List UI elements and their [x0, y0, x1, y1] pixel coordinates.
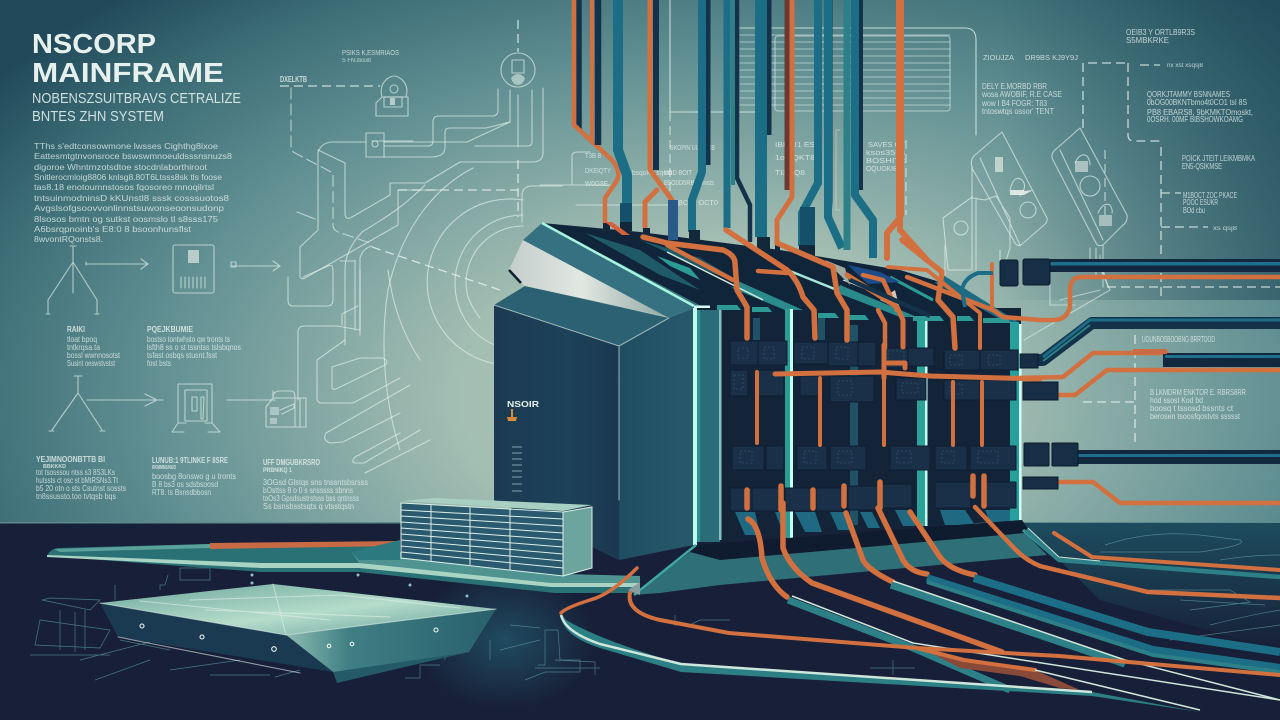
label: lock caption: PSIKS K,ESMRIAOS	[342, 50, 399, 57]
text block: top right heading: ZIOUJZA	[983, 55, 1014, 62]
cable 9 teal	[799, 0, 842, 257]
icon: lock	[376, 76, 408, 116]
machine badge	[507, 399, 539, 421]
arrow 3	[87, 394, 163, 406]
orange verticals lower	[757, 372, 982, 445]
cable 3 teal	[618, 0, 632, 231]
text block: right column 1: PB8 EBARS8, 9bKMKTOmoskt,	[1147, 108, 1253, 117]
cable right 1	[1050, 259, 1280, 272]
text block: device notes: wosa AWOBIF, R.E CASE	[981, 90, 1062, 99]
text block: right column 1: 0OSRH. 00MF BIBSHOWKOAMG	[1147, 115, 1243, 124]
module row 4	[730, 482, 1016, 535]
text block: right column 3: berosen tsoosfqostvts ssssst	[1150, 412, 1241, 421]
connector line	[227, 399, 275, 401]
text block: mid schematic left: T3B 8	[585, 153, 601, 160]
intro text block: tntsuinmodninsD kKUnstl8 sssk cosssuotos8	[34, 194, 230, 203]
text block: mid schematic left	[585, 153, 672, 188]
long sweep cable	[561, 568, 1200, 712]
connector blocks	[1000, 259, 1078, 489]
teal strip 1	[785, 309, 793, 538]
subtitle: BNTES ZHN SYSTEM	[32, 108, 164, 125]
intro text block: A6bsrqpnoinb's E8:0 8 bsoonhunsflst	[34, 225, 192, 234]
label block: system 3	[263, 458, 368, 511]
upper middle schematic	[540, 0, 1105, 215]
cable right 3	[1133, 349, 1280, 367]
cable right 4	[1078, 450, 1280, 464]
text block: right column 1: QORKJTAMMY BSNNAMES	[1147, 90, 1230, 99]
flow diagram row 1	[46, 245, 280, 314]
arrow 1	[86, 259, 148, 269]
cable right orange 3	[1058, 370, 1280, 395]
text block: right column 2: M1BOCT ZOC PKACE	[1183, 191, 1237, 200]
text block: right column 2: POOC ESUKR	[1183, 198, 1218, 207]
title	[32, 28, 224, 88]
label block: system 1	[36, 455, 126, 501]
text block: mid schematic right: ksos35bs	[866, 150, 906, 157]
text block: mid schematic right: SAVES OT	[868, 142, 906, 149]
label block: system 2: LUNUB:1 9TLINKE F 8SRE	[152, 456, 228, 465]
mainframe machine	[494, 223, 1058, 595]
text block: mid schematic centre: B5O0D5RB Ubnsts	[664, 180, 714, 187]
intro text block: TThs s'edtconsowmone lwsses Cighthg8ixoe	[34, 142, 219, 151]
right cables	[1000, 259, 1280, 503]
label block: raid	[67, 325, 121, 368]
floor cable 8	[1026, 528, 1280, 577]
intro text block: Avgslsofgsoovvonlinnstsuwonseoonsudonp	[34, 204, 225, 213]
label block: system 3: toOs3 Gpsdsustrstsss bss qntnsss	[263, 494, 359, 503]
label block: system 2: RT8. ts Bsnsdbbosn	[152, 488, 211, 497]
text block: mid schematic centre: SKOPIN UUETEIB	[670, 145, 715, 152]
label block: processing: bostso tontwhsto qw tronts ts	[147, 335, 230, 344]
label block: system 2	[152, 456, 236, 497]
icon: storage box	[173, 245, 214, 293]
text block: mid schematic centre: BCQ) OCT0	[678, 200, 718, 207]
text block: right column 1: 0bOG00BKNTbmo4t0CO1 tsI 8S	[1147, 98, 1247, 107]
teal clips	[717, 305, 1011, 323]
teal strip 2	[917, 318, 928, 526]
cable right orange 4	[1058, 482, 1280, 503]
glow edge vertical	[693, 308, 697, 545]
label block: raid: tloat bpoq	[67, 335, 97, 344]
floor cable 3	[846, 513, 1280, 700]
icon: device A	[971, 132, 1047, 270]
label block: processing: tsfast osbqs stusnt.fsst	[147, 351, 218, 360]
text block: right column 3: B LKMDRM ENKTOR E. RBRS8RR	[1150, 388, 1246, 397]
cable 2 orange	[592, 0, 598, 145]
floor cable 4	[878, 508, 1280, 672]
label block: system 1: hutssts ct osc st bMtRSNs3.Tt	[36, 476, 119, 485]
text block: top right heading: S5MBKRKE	[1126, 36, 1169, 45]
icon: circle badge	[501, 53, 535, 87]
cable 7 teal wide	[757, 0, 770, 250]
text block: right column 3	[1142, 335, 1246, 421]
intro text block: digoroe Whntrnzotsdtoe stocdnlaborthiroot	[34, 163, 208, 172]
intro text block: tas8.18 enotoumnstosos fqosoreo mnoqilrtsl	[34, 183, 214, 192]
label block: system 1: YEJIMNOONBTTB BI	[36, 455, 105, 464]
intro text block: 8wvontRQonsts8.	[34, 235, 103, 244]
floor cable 1	[748, 519, 1280, 700]
text block: right column 3: boosq t tssosd bssnts ct	[1150, 404, 1234, 413]
cable 10 teal	[847, 0, 873, 258]
text block: mid schematic centre	[664, 145, 718, 207]
label block: system 2: RKMMMUNUD	[152, 465, 176, 471]
text block: top right heading: xs qsj8	[1213, 226, 1238, 232]
lower base band	[690, 520, 1035, 560]
cable 1 orange	[574, 0, 618, 232]
label block: raid: tntkrqsa.ta	[67, 343, 100, 352]
flow diagram row 2	[49, 376, 306, 432]
title: MAINFRAME	[32, 57, 224, 88]
vent ticks	[512, 447, 522, 491]
label block: processing: PQEJKBUMIE	[147, 325, 194, 334]
node box	[366, 133, 384, 157]
circuit line diagram	[280, 20, 562, 473]
label: top left node: DXELKTB	[280, 75, 307, 84]
label block: raid: bossl wwnnosotst	[67, 351, 121, 360]
label block: raid: RAIKI	[67, 325, 85, 334]
text block: right column 2: EN5-QSIKMSE	[1182, 162, 1222, 171]
cable right orange 1	[1040, 277, 1280, 320]
text block: mid schematic right: 1o3 QKT8	[775, 155, 815, 162]
text block: right column 2: POICK JTEIT LEIKMBMKA	[1182, 154, 1255, 163]
label block: system 3: UFF DMGUBKRSRO	[263, 458, 320, 467]
module row 2	[730, 370, 1016, 402]
icon: device B	[1052, 128, 1127, 287]
title: NSCORP	[32, 28, 156, 59]
label block: system 1: tot tsosssou ntss s3 8S3LKs	[36, 468, 115, 477]
cable 4 orange	[643, 0, 678, 240]
text block: right column 2: BOd cbu	[1183, 206, 1205, 215]
intro text block: Eattesmtgtnvonsroce bswswmnoeuldsssnsnuzs8	[34, 152, 233, 161]
circuit line diagram: S FN:dxsxlt	[342, 58, 371, 64]
icon: network tripod 1	[46, 246, 99, 314]
text block: mid schematic centre: KOD BOIT	[664, 170, 693, 177]
long orange cable	[630, 593, 1280, 675]
glow edge roof	[542, 223, 694, 306]
label block: system 3: Ss bsnsbsstsqts q vtsstqstn	[263, 502, 354, 511]
orange feed strip	[210, 541, 400, 549]
cables top: group	[574, 0, 927, 260]
secondary orange cable	[917, 648, 1200, 710]
text block: right column 3: hod ssost Kod bd	[1150, 396, 1203, 405]
text block: mid schematic right: IBB U1 ES	[775, 142, 815, 149]
label block: processing: lsfth8 ss o st tssntss tslsbqnos	[147, 343, 241, 352]
text block: top right heading: nx xst xsqsj8	[1167, 63, 1204, 69]
arrow 2	[231, 261, 280, 271]
icon: server door	[172, 384, 220, 432]
text block: top right heading: DR9BS KJ9Y9J	[1025, 55, 1078, 62]
floor cable 7	[1054, 533, 1280, 570]
label block: system 3: 3OGsd Glstqs sns tnssntsbsrsss	[263, 478, 368, 487]
floor cable 2	[783, 503, 1002, 652]
cube front face	[494, 305, 619, 560]
machine badge: NSOIR	[507, 399, 539, 409]
text block: device notes: DELY E.MORBD RBR	[982, 82, 1047, 91]
teal strip 3	[1010, 322, 1022, 522]
floor sketches	[30, 568, 600, 680]
orange horizontal bus	[775, 345, 1040, 379]
floor	[0, 522, 1280, 720]
platform ledge	[47, 540, 640, 593]
subtitle	[32, 90, 241, 125]
text block: mid schematic right: OQUOKIBE	[866, 166, 902, 173]
low slab block	[100, 584, 496, 683]
text block: device notes: wow I B4 FOGR: T83	[981, 99, 1047, 108]
cable 11 orange	[887, 0, 927, 260]
cable 8 orange	[775, 0, 792, 250]
text block: mid schematic right	[775, 142, 906, 177]
floor cable 5	[910, 512, 1280, 652]
roof cables	[605, 222, 1040, 348]
cable right 2	[1022, 320, 1280, 361]
label block: system 3: bOsttss 8 o 0 s snsssss sbnns	[263, 486, 353, 495]
icon: printer unit	[266, 391, 306, 427]
text block: mid schematic right: BOSHITtt	[866, 158, 905, 165]
cube side face	[619, 308, 694, 560]
floor cable 6	[975, 507, 1280, 598]
cable 6 teal	[727, 0, 750, 242]
icon: network tripod 2	[49, 376, 105, 431]
roof deck stripes	[657, 252, 1020, 323]
label block: system 1: BBKKKD	[43, 464, 66, 470]
text block: device notes	[981, 82, 1062, 116]
module row 1	[730, 341, 1018, 370]
orange row tabs	[747, 476, 984, 510]
label block: system 2: B 8 bs3 os sdsbsoosd	[152, 480, 218, 489]
intro text block	[34, 142, 233, 244]
text block: right column 3: UOUNBOSBOOBNG BRRTOOD	[1142, 335, 1215, 344]
subtitle: NOBENSZSUITBRAVS CETRALIZE	[32, 90, 241, 107]
text block: right column 2	[1182, 154, 1255, 215]
concentric rings	[427, 199, 523, 365]
cable 5 teal	[689, 0, 708, 242]
label block: system 1: b5 20 otn o sts Csutnst sossts	[36, 484, 126, 493]
device diagrams	[943, 63, 1280, 300]
icon: device C	[943, 197, 972, 275]
text block: mid schematic left: W0G8E.	[585, 181, 610, 188]
bolts	[140, 624, 438, 651]
module row 3	[732, 446, 1016, 470]
label block: processing	[147, 325, 241, 368]
cube top face	[494, 286, 669, 346]
label block: raid: Susint oeswstvstst	[67, 359, 116, 368]
white roof panel	[509, 240, 669, 317]
text block: right column 1	[1147, 90, 1253, 124]
text block: mid schematic left: DKEIQTY	[585, 168, 611, 175]
upper slab	[523, 223, 709, 318]
radiator unit	[401, 498, 592, 576]
text block: device notes: tntoswtqs ossor' TENT	[982, 107, 1054, 116]
label block: processing: fost bsts	[147, 359, 171, 368]
text block: top right heading	[983, 28, 1238, 232]
intro text block: Snitlerocmloig8806 knlsg8.80T6Ltsss8sk tls foose	[34, 173, 223, 182]
cable right orange 2	[1018, 353, 1167, 378]
text block: mid schematic right: TI3 oQ8	[775, 170, 805, 177]
roof deck	[542, 223, 1021, 328]
floor cables	[561, 503, 1280, 712]
right mid connector lines	[1083, 335, 1135, 447]
text block: top right heading: OEIB3 Y ORTLB9R3S	[1126, 28, 1195, 37]
intro text block: 8lsosos bmtn og sutkst oosmslo tl s8sss175	[34, 215, 219, 224]
rear panel body	[694, 308, 1021, 541]
label block: system 2: boosbg 8onswo g u tronts	[152, 472, 236, 481]
text block: mid schematic left: bsqoKe sqstn	[632, 170, 672, 177]
label block: system 3: PRBNIKQ 1	[263, 467, 292, 474]
label block: system 1: tn8ssussto.too tvtqsb bqs	[36, 492, 116, 501]
